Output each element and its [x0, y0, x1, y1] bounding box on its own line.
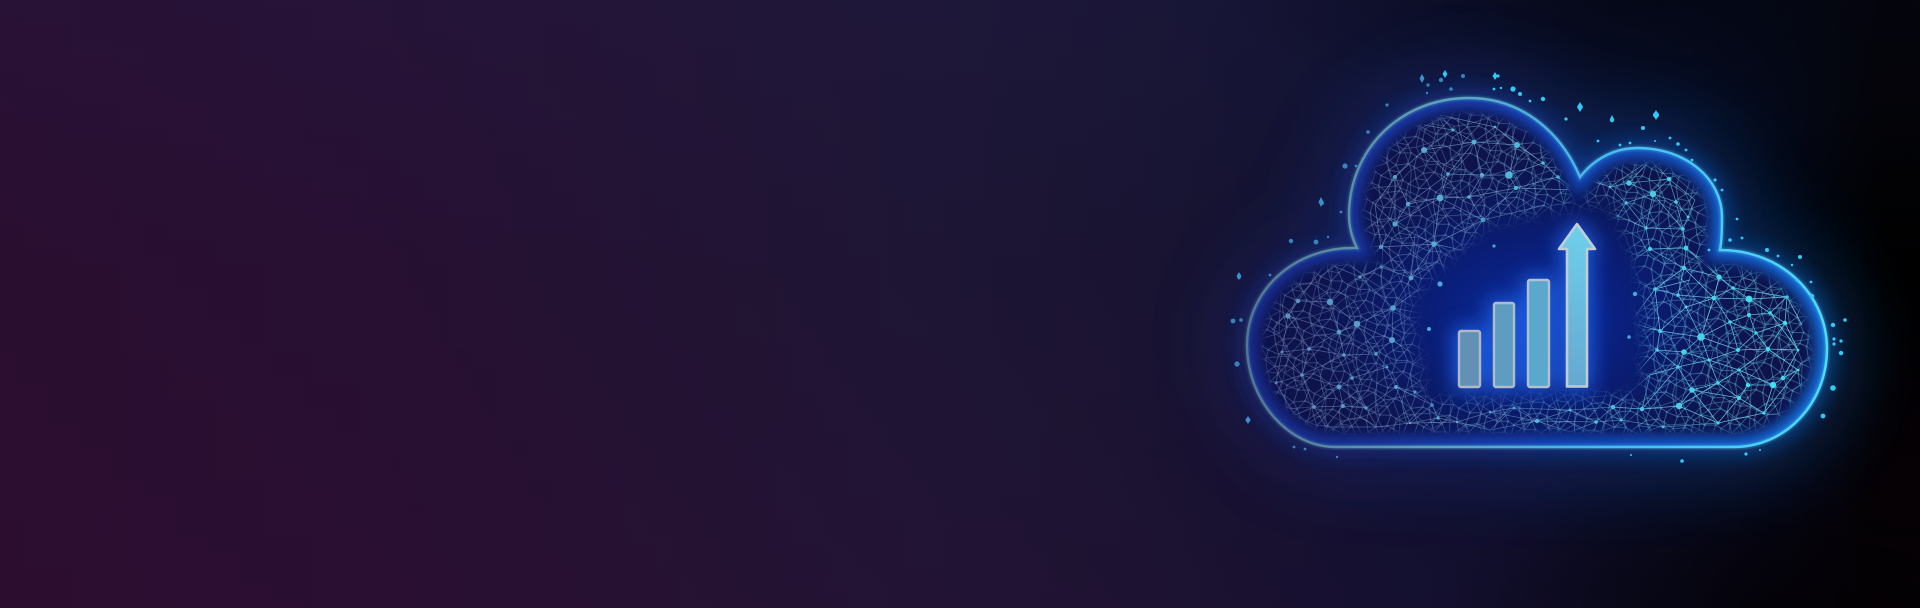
mesh lines: middle lobe [1590, 160, 1719, 277]
bar 3 [1528, 280, 1549, 387]
mesh lines: right lobe [1613, 268, 1802, 423]
isolated nodes near the chart [1427, 244, 1637, 339]
illustration: glowing network cloud with growth chart [1201, 42, 1892, 513]
scattered particles around the cloud [1231, 70, 1847, 463]
mesh lines: top lobe [1375, 115, 1575, 278]
bar 2 [1494, 303, 1514, 387]
cloud outline [1247, 98, 1827, 447]
fine mesh texture [1260, 111, 1814, 434]
arrow [1559, 224, 1595, 386]
mesh lines: bottom band [1326, 405, 1718, 432]
mesh nodes [1275, 126, 1799, 428]
growth chart [1454, 219, 1602, 391]
network mesh inside the cloud [1260, 111, 1814, 434]
mesh lines: left lobe [1272, 235, 1458, 427]
chart glow [1454, 219, 1602, 391]
cloud body fill with inner glow [1240, 90, 1840, 455]
bar 1 [1459, 331, 1480, 387]
cloud outer glow [1247, 98, 1827, 447]
